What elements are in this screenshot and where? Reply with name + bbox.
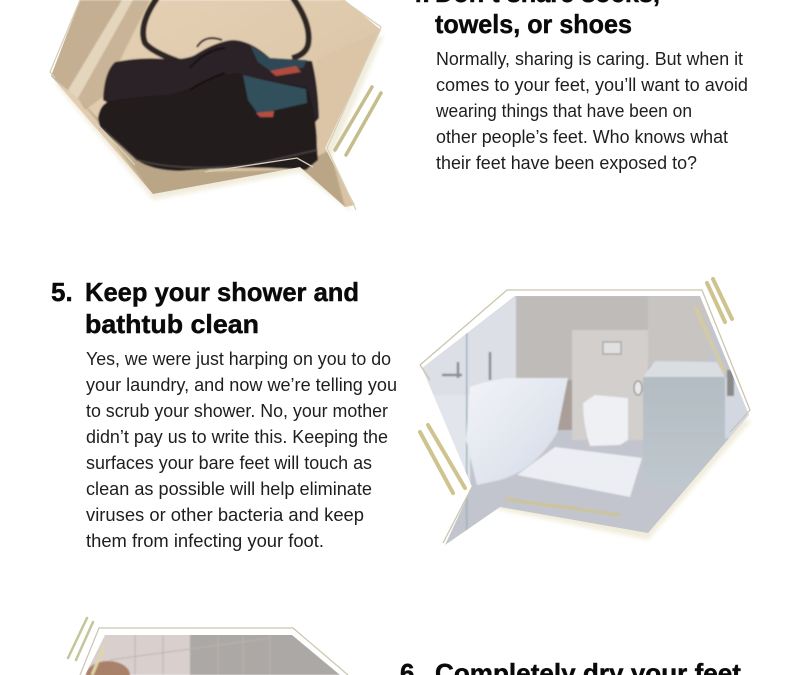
photo: black shoes on a wooden floor [40, 0, 390, 215]
text block: tip 4 body [435, 49, 748, 173]
photo: white bathroom [415, 290, 755, 550]
photo frame outline [50, 0, 381, 210]
text block: tip 5 body: to scrub your shower. No, your mother [86, 401, 388, 421]
shower mixer [442, 352, 490, 380]
text block: tip 5 body: your laundry, and now we’re telling you [86, 375, 397, 395]
gold accent strips [68, 618, 93, 660]
photo frame outline [420, 290, 750, 543]
text block: tip 5 body [86, 349, 397, 551]
text block: tip 4 body: wearing things that have been on [435, 101, 692, 121]
toilet paper [634, 381, 642, 395]
text block: tip 5 body: them from infecting your foot. [86, 531, 324, 551]
front shoe [98, 73, 318, 171]
back shoe sock [250, 45, 307, 72]
heading: tip 5: bathtub clean [85, 309, 259, 339]
gold accent strips [420, 279, 732, 493]
text block: tip 5 body: didn’t pay us to write this. Keeping the [86, 427, 388, 447]
vanity [642, 376, 725, 442]
heading: tip 4 [408, 0, 660, 39]
heading: tip 5: 5. [51, 277, 73, 307]
text block: tip 4 body: other people’s feet. Who knows what [436, 127, 728, 147]
front shoe sock [243, 75, 307, 114]
text block: tip 5 body: clean as possible will help eliminate [86, 479, 372, 499]
belt [143, 0, 309, 62]
photo frame outline [80, 628, 348, 675]
toilet [583, 395, 628, 446]
photo: tiled wall with hand [85, 635, 340, 675]
text block: tip 5 body: Yes, we were just harping on you to do [86, 349, 391, 369]
panel: bathroom photo [415, 279, 755, 552]
back shoe [102, 39, 320, 122]
text block: tip 4 body: comes to your feet, you’ll want to avoid [436, 75, 748, 95]
gold accent strips [335, 87, 381, 155]
heading: tip 4: towels, or shoes [435, 9, 632, 39]
panel: shoes photo [40, 0, 390, 215]
text block: tip 4 body: their feet have been exposed to? [436, 153, 697, 173]
bathtub [466, 378, 568, 485]
heading: tip 5: Keep your shower and [85, 277, 359, 307]
panel: tile wall photo [68, 618, 350, 675]
text block: tip 5 body: viruses or other bacteria and keep [86, 505, 364, 525]
text block: tip 5 body: surfaces your bare feet will touch as [86, 453, 372, 473]
floor mat [517, 447, 642, 497]
heading: tip 5 [51, 277, 359, 339]
text block: tip 4 body: Normally, sharing is caring. But when it [436, 49, 743, 69]
